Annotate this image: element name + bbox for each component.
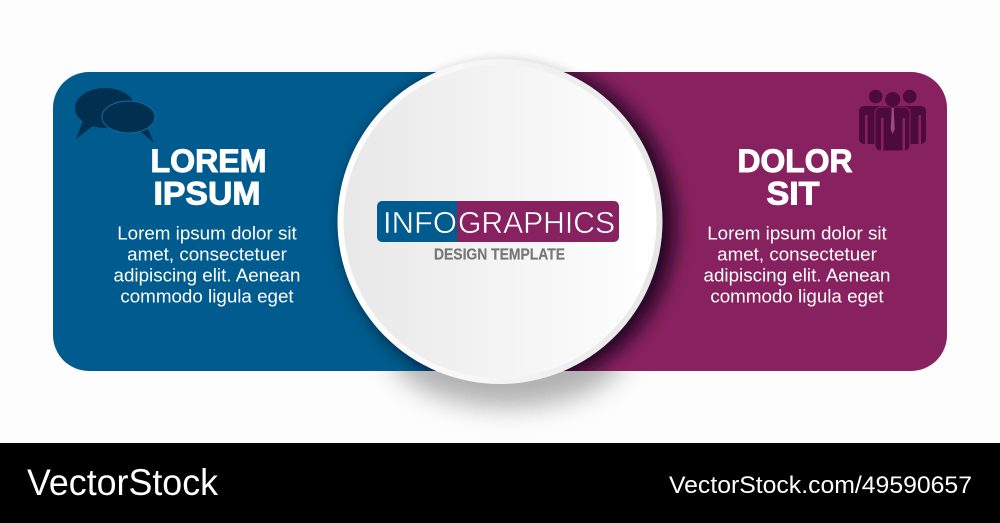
heading: lorem ipsum: LOREM: [150, 143, 266, 179]
text block: right: commodo ligula eget: [710, 286, 884, 306]
circle shadow below band: [382, 371, 634, 422]
text block: left: amet, consectetuer: [127, 244, 287, 264]
logo: infographics: [377, 201, 619, 242]
panel: left blue: [53, 72, 500, 371]
text block: right: adipiscing elit. Aenean: [704, 264, 890, 286]
heading: dolor sit: SIT: [766, 176, 820, 212]
logo: infographics: GRAPHICS: [458, 205, 615, 240]
footer bar: [0, 443, 1000, 523]
logo: infographics: INFO: [383, 205, 457, 240]
footer logo: VectorStock: [27, 462, 218, 503]
text block: right: Lorem ipsum dolor sit: [707, 222, 888, 244]
circle shadow on band: [345, 60, 675, 390]
text block: left: Lorem ipsum dolor sit: [117, 222, 298, 244]
center circle: [338, 59, 662, 384]
heading: dolor sit: [738, 143, 852, 212]
circle shadow above band: [430, 54, 576, 72]
panel: left and right band: [53, 72, 947, 371]
subtitle: design template: DESIGN TEMPLATE: [434, 246, 565, 264]
heading: lorem ipsum: [150, 143, 266, 212]
text block: right: amet, consectetuer: [717, 244, 877, 264]
icon: speech bubbles: [75, 88, 155, 143]
panel: right magenta: [500, 72, 947, 371]
heading: lorem ipsum: IPSUM: [154, 176, 260, 212]
text block: left: commodo ligula eget: [120, 286, 294, 306]
heading: dolor sit: DOLOR: [738, 143, 852, 179]
footer url: VectorStock.com/49590657: [669, 472, 972, 499]
text block: left: adipiscing elit. Aenean: [114, 264, 300, 286]
icon: group of people: [859, 90, 926, 151]
